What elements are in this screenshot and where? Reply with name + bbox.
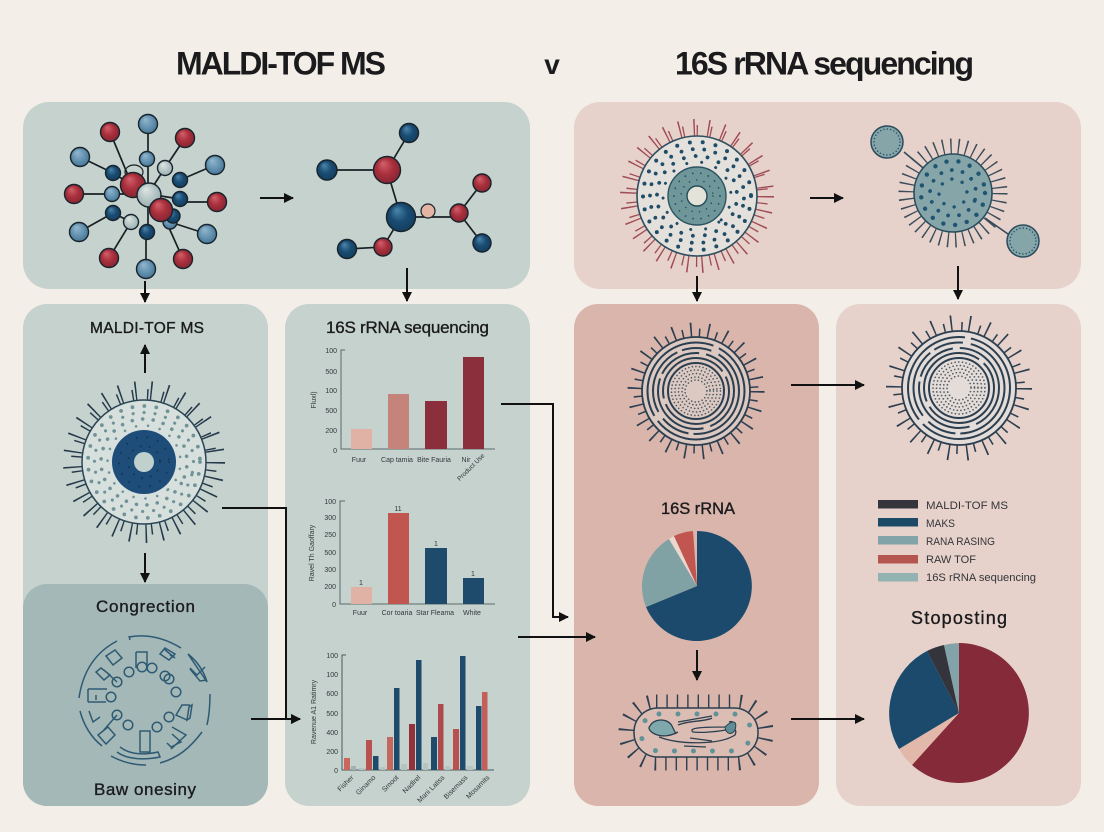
- icon: circular ring diagram: [79, 636, 210, 765]
- bar chart: top: Fuur: [352, 457, 367, 464]
- legend: RAW TOF: [926, 554, 976, 566]
- bar chart: middle: Cor toaria: [382, 610, 412, 617]
- pie chart: Stoposting: [889, 643, 1029, 783]
- panel: top right cells: [574, 102, 1081, 289]
- bar chart: middle: [309, 499, 495, 617]
- heading: 16S rRNA: 16S rRNA: [661, 500, 735, 518]
- bar chart: bottom grouped: 100: [326, 653, 338, 660]
- bar chart: top: Nir: [462, 457, 471, 464]
- panel: MALDI-TOF MS column: [23, 304, 268, 806]
- bar chart: top: Product Use: [456, 452, 487, 483]
- icon: rod bacterium: [631, 707, 761, 758]
- icon: concentric ring cell: [635, 330, 757, 452]
- bar chart: bottom grouped: Fisher: [337, 774, 356, 793]
- arrow: down to bacillus: [696, 650, 698, 680]
- legend: MALDI-TOF MS: [926, 500, 1008, 512]
- legend: RANA RASING: [926, 536, 995, 548]
- main title: 16S rRNA sequencing: 16S rRNA sequencing: [675, 46, 974, 82]
- bar chart: bottom grouped: 500: [326, 711, 338, 718]
- icon: round cell with red spikes: [629, 128, 765, 264]
- pie chart: 16S rRNA: [642, 531, 752, 641]
- bar chart: top: Fluxl): [311, 391, 318, 409]
- bar chart: bottom grouped: 400: [326, 730, 338, 737]
- bar chart: bottom grouped: Ravenue A1 Ratimry: [311, 679, 318, 744]
- bar chart: bottom grouped: Ginamo: [355, 774, 377, 797]
- arrow: cells: [810, 197, 843, 199]
- bar chart: middle: Ravel Th Gaoffary: [309, 524, 316, 581]
- bar chart: middle: 300: [324, 567, 336, 574]
- arrow: congregation to chart: [251, 718, 300, 720]
- arrow: molecules: [260, 197, 293, 199]
- bar chart: top: 500: [325, 408, 337, 415]
- icon: complex molecule cluster: [64, 114, 226, 278]
- bar chart: bottom grouped: Bisemass: [443, 774, 470, 801]
- bar chart: middle: 0: [332, 602, 336, 609]
- heading: Stoposting: Stoposting: [911, 608, 1007, 628]
- bar chart: middle: 1: [471, 571, 475, 578]
- bar chart: bottom grouped: 0: [334, 768, 338, 775]
- icon: simple molecule: [317, 124, 491, 258]
- bar chart: top: 500: [325, 369, 337, 376]
- bar chart: middle: 200: [324, 584, 336, 591]
- arrow: elbow from top chart to 16S panel: [501, 404, 568, 617]
- panel: top left molecules: [23, 102, 530, 289]
- panel: 16S rRNA sequencing charts: [285, 304, 530, 806]
- icon: teal cell with satellites: [871, 126, 1039, 257]
- legend: MAKS: [926, 518, 955, 530]
- heading: Congrection: Congrection: [96, 597, 195, 616]
- bar chart: bottom grouped: Nadlrel: [402, 774, 423, 795]
- arrow: teal cell to right panel: [957, 266, 959, 299]
- arrow: up: [144, 345, 146, 373]
- bar chart: middle: Star Fleama: [416, 610, 454, 617]
- panel: congregation: [23, 584, 268, 806]
- bar chart: bottom grouped: [311, 653, 494, 804]
- bar chart: middle: 11: [394, 506, 402, 513]
- panel: legend and summary: [836, 304, 1081, 806]
- bar chart: bottom grouped: Mani Latiss: [416, 774, 447, 804]
- bar chart: bottom grouped: 100: [326, 672, 338, 679]
- arrow: top right to 16S panel: [696, 276, 698, 301]
- main title: MALDI-TOF MS: MALDI-TOF MS: [176, 46, 386, 82]
- bar chart: middle: 300: [324, 515, 336, 522]
- bar chart: middle: 1: [359, 580, 363, 587]
- icon: cell with navy nucleus: [73, 391, 215, 533]
- bar chart: bottom grouped: Mosamits: [465, 774, 492, 801]
- bar chart: top: 100: [325, 348, 337, 355]
- icon: concentric ring cell: [894, 323, 1024, 453]
- bar chart: top: Bite Fauria: [417, 457, 451, 464]
- bar chart: middle: 500: [324, 550, 336, 557]
- arrow: elbow from MALDI cell to chart: [222, 508, 300, 719]
- legend: [878, 500, 1036, 584]
- heading: 16S rRNA sequencing: 16S rRNA sequencing: [326, 318, 489, 337]
- bar chart: bottom grouped: 200: [326, 749, 338, 756]
- bar chart: bottom grouped: Smoot: [381, 774, 400, 794]
- arrow: bacterium to pie: [791, 718, 864, 720]
- bar chart: middle: 1: [434, 541, 438, 548]
- bar chart: top: 100: [325, 388, 337, 395]
- arrow: down to congregation: [144, 553, 146, 582]
- bar chart: bottom grouped: 600: [326, 691, 338, 698]
- arrow: molecule to sequencing panel: [406, 268, 408, 301]
- bar chart: middle: 250: [324, 532, 336, 539]
- title separator: v: v: [544, 49, 560, 80]
- bar chart: top: [311, 348, 495, 483]
- bar chart: top: 0: [333, 448, 337, 455]
- legend: 16S rRNA sequencing: [926, 572, 1036, 584]
- arrow: ring cell to ring cell: [791, 384, 864, 386]
- bar chart: middle: White: [463, 610, 481, 617]
- bar chart: middle: 100: [324, 499, 336, 506]
- bar chart: middle: Fuur: [353, 610, 368, 617]
- arrow: top left to MALDI panel: [144, 281, 146, 302]
- arrow: charts to pie: [518, 636, 595, 638]
- bar chart: top: 200: [325, 428, 337, 435]
- heading: MALDI-TOF MS: MALDI-TOF MS: [90, 320, 204, 337]
- text: Baw onesiny: Baw onesiny: [94, 780, 196, 799]
- panel: 16S rRNA column: [574, 304, 819, 806]
- bar chart: top: Cap tamia: [381, 457, 413, 464]
